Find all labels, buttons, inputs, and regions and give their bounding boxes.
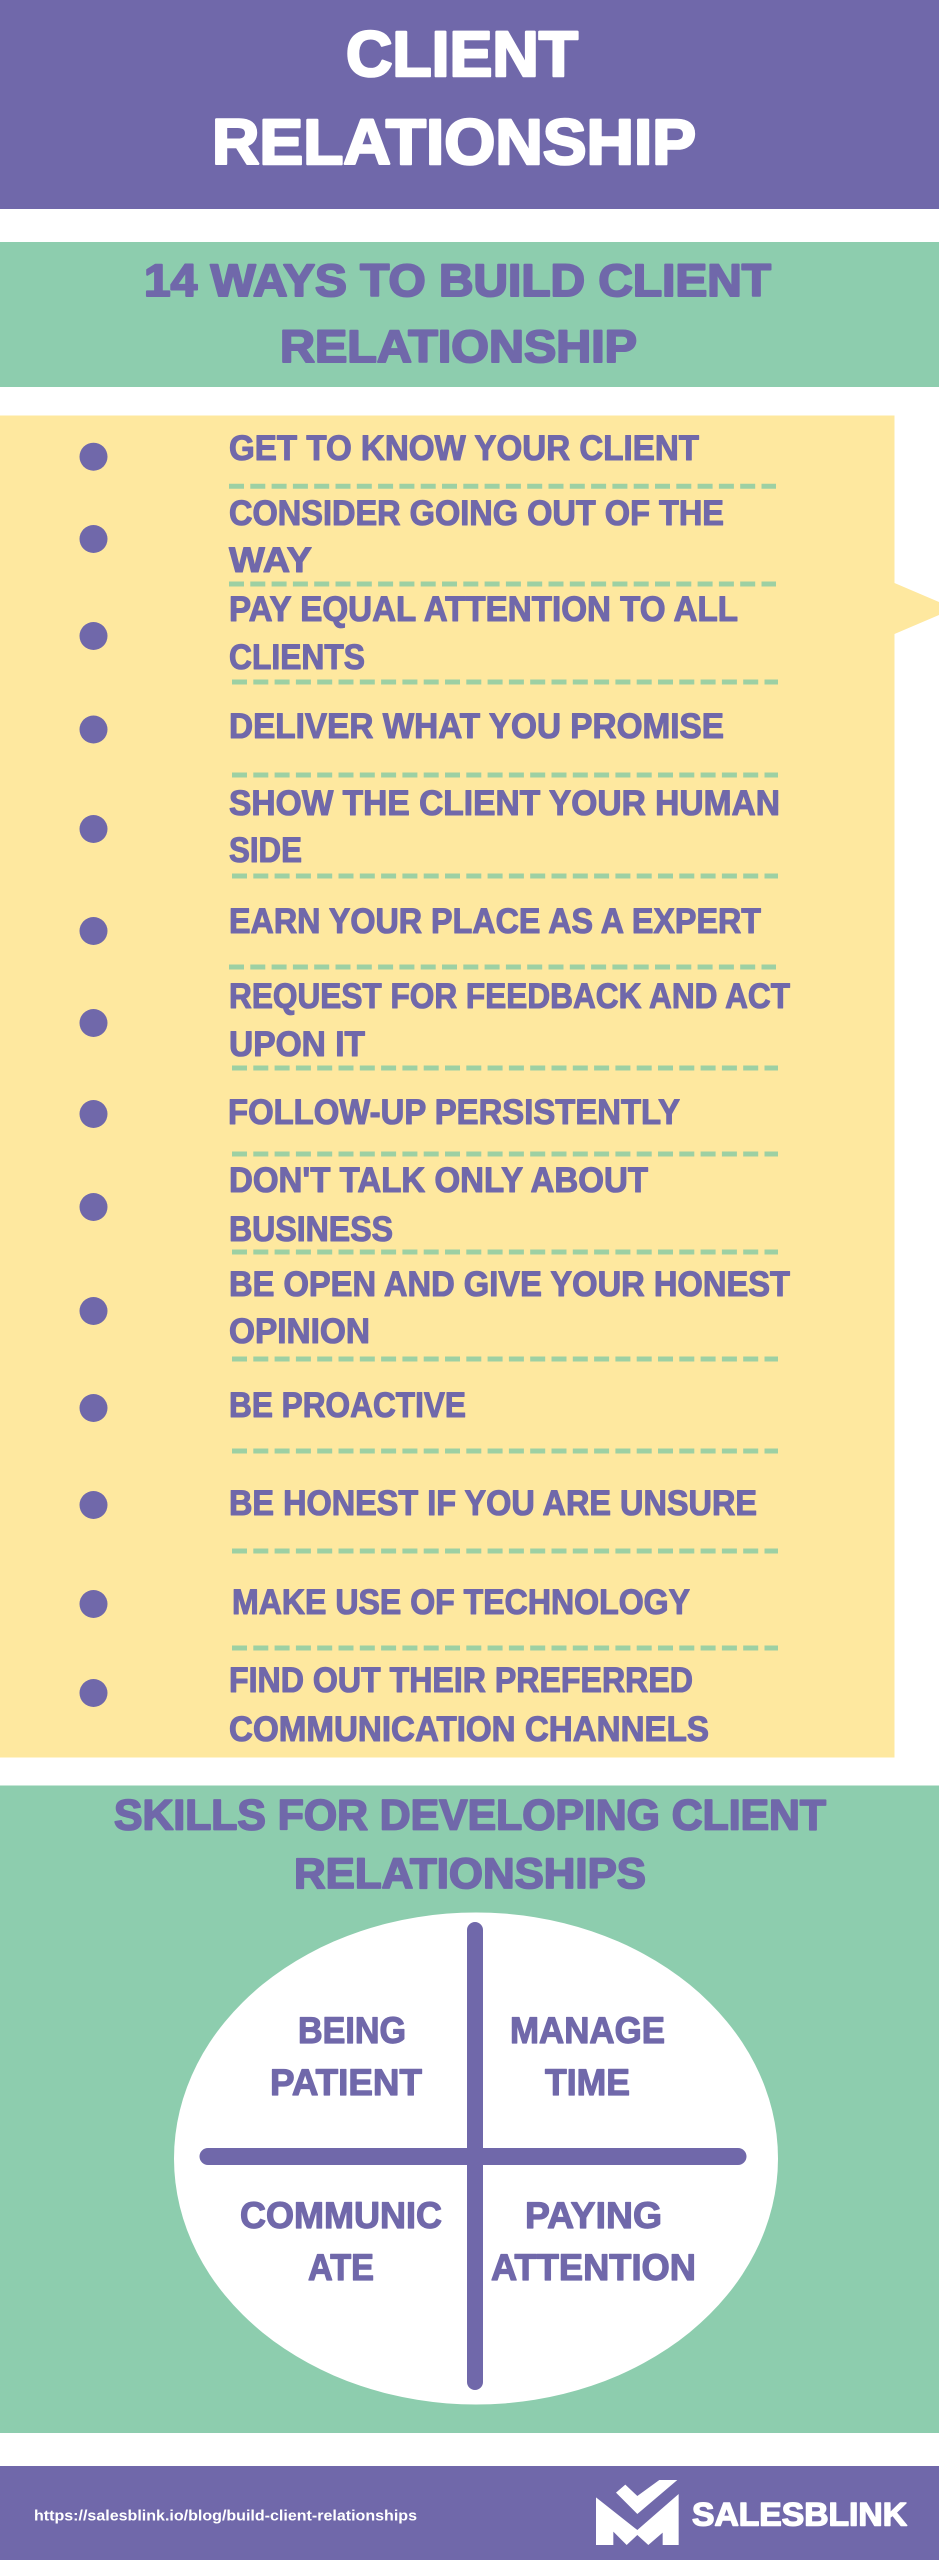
list item 9 (80, 1161, 648, 1249)
skill: communicate: ATE (308, 2247, 374, 2288)
title (212, 18, 696, 178)
list item 14: FIND OUT THEIR PREFERRED (229, 1661, 693, 1700)
callout background with arrow (0, 416, 939, 1758)
list item 3: CLIENTS (229, 638, 365, 677)
source url: https://salesblink.io/blog/build-client-relationships (34, 2508, 417, 2524)
heading: RELATIONSHIP (280, 321, 637, 372)
skills heading: SKILLS FOR DEVELOPING CLIENT (114, 1792, 826, 1840)
skill: manage time (510, 2010, 665, 2103)
list item 7: REQUEST FOR FEEDBACK AND ACT (229, 977, 790, 1016)
list item 4: DELIVER WHAT YOU PROMISE (229, 707, 724, 746)
list item 7 (80, 977, 790, 1064)
footer (0, 2466, 939, 2560)
list item 2 (80, 494, 724, 580)
list item 2: CONSIDER GOING OUT OF THE (229, 494, 724, 533)
list item 14 (80, 1661, 709, 1749)
list item 2: WAY (229, 541, 312, 580)
list item 1: GET TO KNOW YOUR CLIENT (229, 429, 699, 468)
list item 3: PAY EQUAL ATTENTION TO ALL (229, 590, 738, 629)
list item 6 (80, 902, 761, 945)
quadrant diagram (174, 1912, 778, 2404)
list item 10: BE OPEN AND GIVE YOUR HONEST (229, 1265, 790, 1304)
skill: being patient: BEING (298, 2010, 406, 2051)
list item 1 (80, 429, 699, 471)
list item 11: BE PROACTIVE (229, 1386, 466, 1425)
list item 5 (80, 784, 780, 870)
skills heading (114, 1792, 826, 1898)
skill: communicate: COMMUNIC (240, 2195, 442, 2236)
list item 10: OPINION (229, 1312, 370, 1351)
header banner (0, 0, 939, 209)
panel: skills (0, 1786, 939, 2433)
list item 5: SHOW THE CLIENT YOUR HUMAN (229, 784, 780, 823)
list item 8: FOLLOW-UP PERSISTENTLY (228, 1093, 680, 1132)
list item 14: COMMUNICATION CHANNELS (229, 1710, 709, 1749)
skill: being patient (270, 2010, 422, 2103)
heading (144, 255, 771, 372)
list item 11 (80, 1386, 466, 1425)
list item 3 (80, 590, 738, 677)
skill: being patient: PATIENT (270, 2062, 422, 2103)
skill: communicate (240, 2195, 442, 2288)
list item 9: DON'T TALK ONLY ABOUT (229, 1161, 648, 1200)
list item 9: BUSINESS (229, 1210, 393, 1249)
title: CLIENT (346, 18, 578, 90)
skill: manage time: TIME (545, 2062, 630, 2103)
skills heading: RELATIONSHIPS (294, 1850, 646, 1898)
list item 10 (80, 1265, 790, 1351)
skill: paying attention (491, 2195, 696, 2288)
heading: 14 WAYS TO BUILD CLIENT (144, 255, 771, 306)
skill: manage time: MANAGE (510, 2010, 665, 2051)
skill: paying attention: PAYING (525, 2195, 662, 2236)
panel: 14 ways list (0, 416, 939, 1758)
icon: logo mark (596, 2480, 679, 2545)
list item 5: SIDE (229, 831, 302, 870)
list item 7: UPON IT (229, 1025, 365, 1064)
list item 6: EARN YOUR PLACE AS A EXPERT (229, 902, 761, 941)
title: RELATIONSHIP (212, 106, 696, 178)
panel: 14 ways heading (0, 242, 939, 387)
wordmark: SALESBLINK (692, 2497, 907, 2533)
skill: paying attention: ATTENTION (491, 2247, 696, 2288)
salesblink logo (596, 2480, 907, 2545)
list item 12: BE HONEST IF YOU ARE UNSURE (229, 1484, 757, 1523)
list item 13: MAKE USE OF TECHNOLOGY (232, 1583, 690, 1622)
